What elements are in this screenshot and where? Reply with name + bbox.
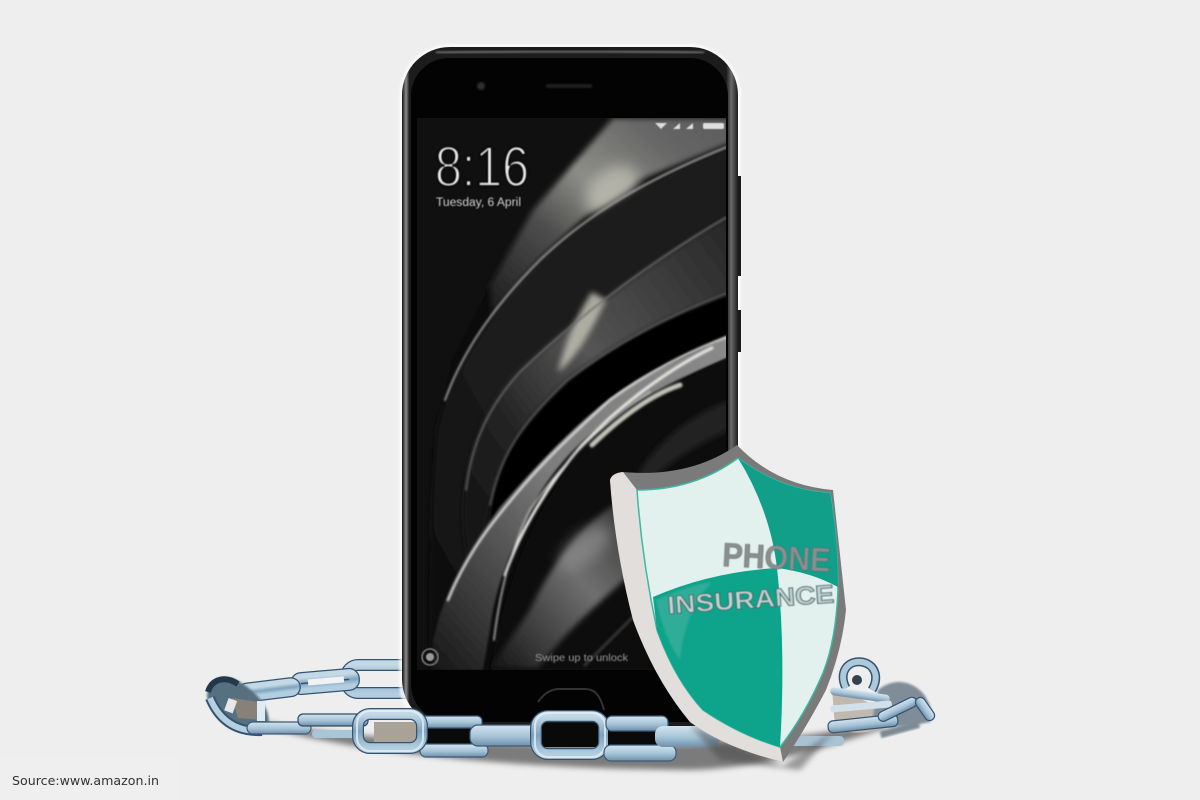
front camera <box>477 82 485 90</box>
left knot <box>207 677 269 732</box>
chain: rear links behind phone <box>243 665 416 697</box>
shield face <box>637 458 838 747</box>
chain shadow <box>235 715 915 770</box>
phone top rim <box>436 51 704 53</box>
shield <box>610 445 846 770</box>
wallpaper right soft fold <box>639 401 726 473</box>
wallpaper lower sweep <box>494 504 624 670</box>
shield sheen <box>656 582 712 660</box>
shield quadrant: upper right <box>738 458 838 587</box>
shield contact shadow <box>690 725 835 770</box>
home button <box>538 689 604 710</box>
shield label PHONE: PHONE <box>722 536 831 579</box>
chain: front links <box>207 662 937 761</box>
wallpaper fold one <box>434 150 726 574</box>
phone body <box>402 47 738 727</box>
clock: 8:16 <box>435 135 529 199</box>
earpiece <box>546 84 592 88</box>
link right of centre <box>608 730 670 746</box>
swipe hint: Swipe up to unlock <box>535 652 629 664</box>
wallpaper main silver band <box>432 335 730 670</box>
phone <box>399 44 741 734</box>
wallpaper fold two <box>487 222 726 488</box>
date: Tuesday, 6 April <box>436 197 521 209</box>
phone bezel <box>411 58 728 722</box>
shield rim <box>610 445 846 762</box>
phone side buttons <box>738 176 741 352</box>
wallpaper dim left wedge <box>417 118 613 670</box>
wallpaper lower black <box>701 358 726 371</box>
source credit: Source:www.amazon.in <box>12 773 159 788</box>
shield quadrant: lower left <box>653 568 782 747</box>
wallpaper glint <box>558 292 606 372</box>
wallpaper bright wedge <box>490 118 730 322</box>
large link centre <box>540 723 600 747</box>
shield label INSURANCE: INSURANCE <box>666 580 835 620</box>
right cluster <box>832 688 892 733</box>
wallpaper highlights <box>445 147 727 665</box>
shield left bevel <box>610 472 783 762</box>
infographic canvas <box>12 44 936 785</box>
wallpaper <box>417 118 730 671</box>
centre flat links <box>418 726 480 744</box>
lower left links <box>247 722 311 734</box>
camera shortcut icon <box>422 649 438 665</box>
status bar icons <box>655 123 724 129</box>
large link with gray core <box>374 722 418 746</box>
source credit <box>0 757 180 800</box>
phone halo <box>399 44 741 734</box>
wallpaper black gap <box>493 298 726 513</box>
